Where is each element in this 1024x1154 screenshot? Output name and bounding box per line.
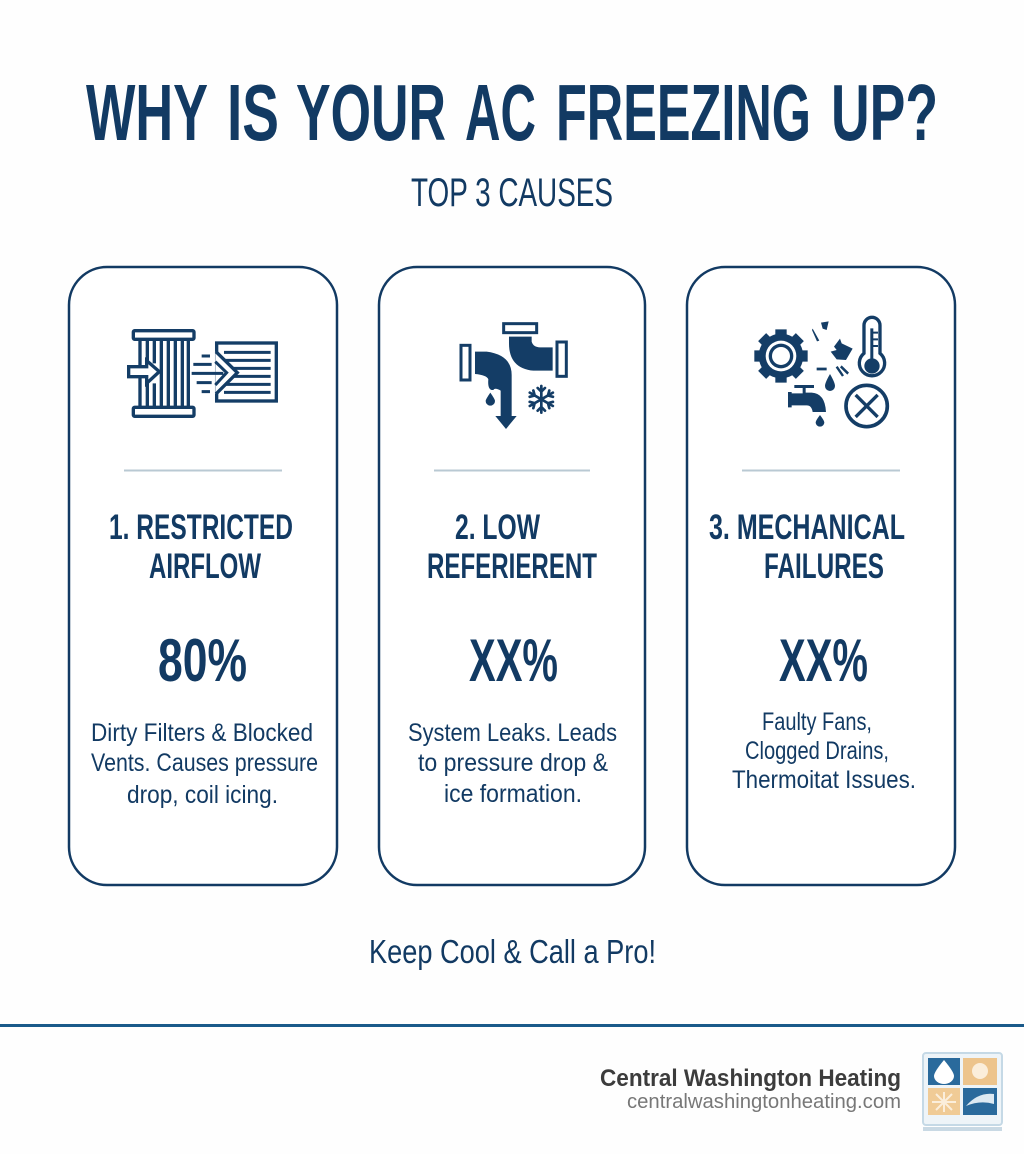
description: to pressure drop & [418,749,608,777]
description: drop, coil icing. [127,781,278,809]
title: YOUR [296,68,446,157]
card outline [687,267,955,885]
description: ice formation. [444,780,582,808]
title: UP? [831,68,938,157]
title: IS [227,68,279,157]
heading [109,508,293,586]
footer website: centralwashingtonheating.com [627,1091,901,1113]
panel: low refrigerant [379,267,645,885]
description: Faulty Fans, [762,708,872,736]
card outline [379,267,645,885]
description: Vents. Causes pressure [91,749,318,777]
footer rule [0,1024,1024,1027]
card outline [69,267,337,885]
call to action: Keep Cool & Call a Pro! [369,933,656,970]
title: WHY [86,68,208,157]
heading: 3. MECHANICAL [709,508,905,547]
heading [427,508,597,586]
heading: 1. RESTRICTED [109,508,293,547]
description [408,719,617,808]
divider [434,470,590,472]
statistic: XX% [779,627,868,694]
description: Clogged Drains, [745,737,889,765]
panel: restricted airflow [69,267,337,885]
icon: leaking pipes and snowflake [461,324,566,429]
description [732,708,916,794]
heading: 2. LOW [455,508,540,547]
statistic: XX% [469,627,558,694]
title [86,68,938,157]
title: AC [465,68,536,157]
subtitle: TOP 3 CAUSES [411,171,613,215]
description: System Leaks. Leads [408,719,617,747]
heading: AIRFLOW [149,547,261,586]
heading [709,508,905,586]
description: Dirty Filters & Blocked [91,719,313,747]
divider [124,470,282,472]
icon: gear, faucet, thermometer and failure mark [754,317,887,427]
title: FREEZING [556,68,811,157]
heading: REFERIERENT [427,547,597,586]
footer company name: Central Washington Heating [600,1065,901,1092]
panel: mechanical failures [687,267,955,885]
description [91,719,318,809]
description: Thermoitat Issues. [732,766,916,794]
logo [923,1053,1002,1131]
heading: FAILURES [764,547,884,586]
icon: filter and vent airflow [129,331,276,416]
divider [742,470,900,472]
statistic: 80% [158,627,247,694]
